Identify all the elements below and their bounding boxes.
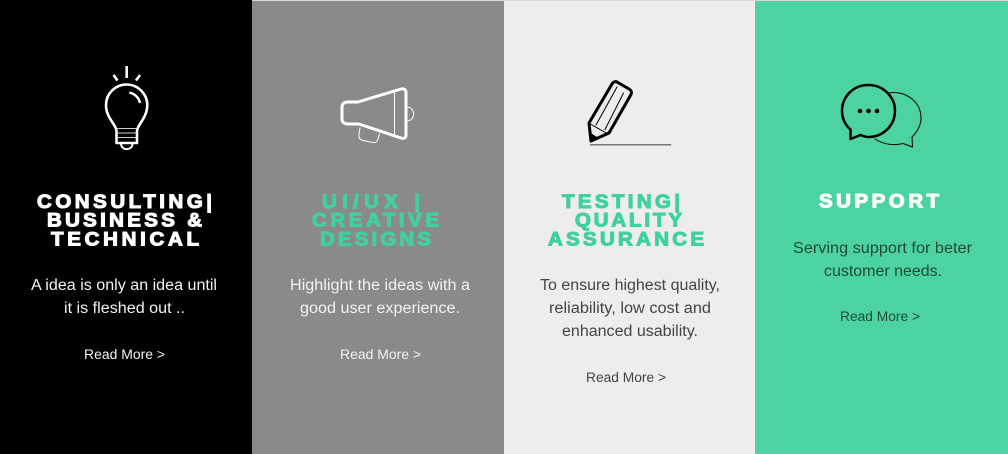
heading: consulting: CONSULTING| (37, 191, 212, 213)
link: read more: Read More > (586, 370, 666, 385)
heading: testing: ASSURANCE (548, 229, 704, 250)
panel: ui/ux (252, 0, 504, 454)
heading: ui/ux: CREATIVE (312, 210, 439, 231)
text: consulting description: A idea is only an idea until (31, 277, 217, 294)
text: support description (793, 240, 972, 280)
panel: support (755, 0, 1008, 454)
heading: testing: TESTING| (562, 191, 680, 213)
icon: light bulb (106, 66, 147, 149)
heading: ui/ux: UI/UX | (322, 191, 420, 213)
heading: ui/ux (312, 191, 439, 250)
heading: consulting: BUSINESS & (47, 210, 202, 231)
text: support description: customer needs. (824, 263, 942, 280)
heading: support: SUPPORT (819, 191, 939, 212)
link: read more: Read More > (840, 309, 920, 324)
heading: consulting (37, 191, 212, 250)
heading: testing: QUALITY (575, 210, 682, 231)
text: ui/ux description: Highlight the ideas with a (290, 277, 470, 294)
text: support description: Serving support for beter (793, 240, 972, 257)
icon: chat bubbles (842, 85, 921, 147)
link: read more: Read More > (340, 347, 421, 362)
text: ui/ux description (290, 277, 470, 317)
heading: consulting: TECHNICAL (51, 229, 199, 250)
text: testing description: enhanced usability. (562, 323, 698, 340)
link: read more: Read More > (84, 347, 165, 362)
heading: testing (548, 191, 704, 250)
heading: ui/ux: DESIGNS (320, 229, 431, 250)
text: testing description: reliability, low cost and (549, 300, 711, 317)
text: consulting description: it is fleshed out .. (64, 300, 185, 317)
panel: testing (504, 0, 755, 454)
text: ui/ux description: good user experience. (300, 300, 460, 317)
text: testing description (540, 277, 720, 340)
text: testing description: To ensure highest quality, (540, 277, 720, 294)
icon: megaphone (342, 89, 414, 143)
icon: pencil (589, 82, 670, 145)
text: consulting description (31, 277, 217, 317)
panel: consulting (0, 0, 252, 454)
